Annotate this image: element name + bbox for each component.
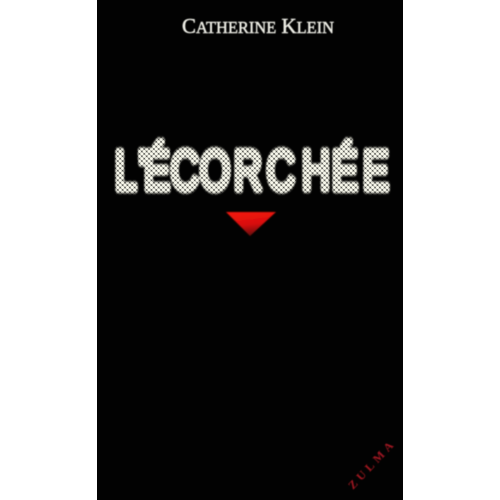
publisher name: ZULMA <box>345 438 396 492</box>
book cover illustration <box>97 0 403 500</box>
title: L'ÉCORCHÉE <box>115 140 389 202</box>
red triangle <box>226 212 276 236</box>
author name: CATHERINE KLEIN <box>182 14 334 38</box>
cover background <box>97 0 403 500</box>
